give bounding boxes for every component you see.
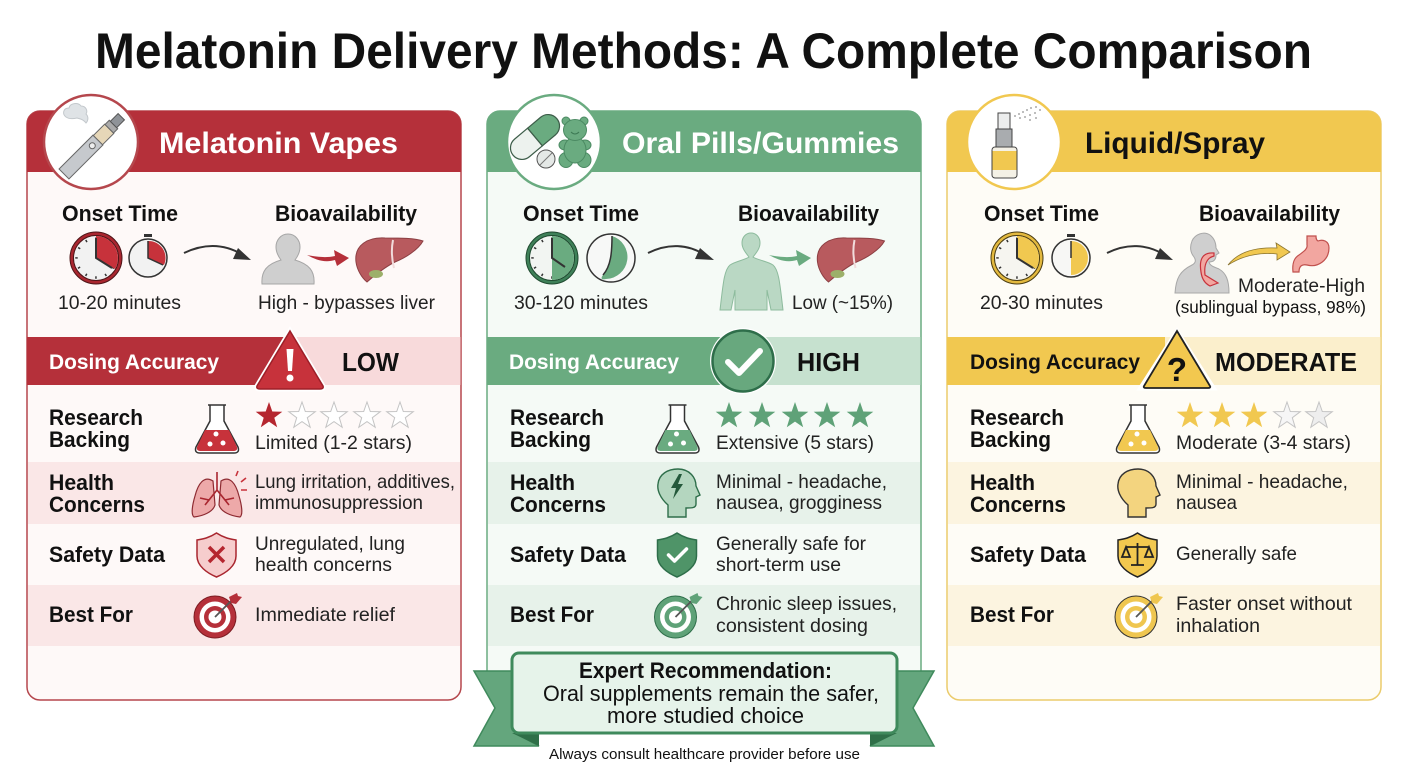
row: health concerns bbox=[510, 469, 887, 517]
row: research backing: Limited (1-2 stars) bbox=[255, 432, 412, 454]
icon: full body person bbox=[720, 233, 783, 310]
row: best for: Best For bbox=[970, 602, 1054, 627]
rating stars bbox=[716, 402, 873, 427]
header: melatonin vapes bbox=[27, 111, 461, 172]
row: best for bbox=[49, 593, 396, 638]
arrow: person to liver bbox=[307, 250, 349, 266]
row: safety data: Safety Data bbox=[49, 542, 166, 567]
icon: warning triangle bbox=[257, 331, 323, 389]
heading: bioavailability: Bioavailability bbox=[275, 201, 418, 226]
icon: target bbox=[654, 593, 702, 638]
icon: question triangle bbox=[1139, 330, 1215, 389]
icon: lungs bbox=[192, 471, 247, 517]
band: dosing accuracy: Dosing Accuracy bbox=[970, 351, 1140, 374]
callout: expert recommendation ribbon bbox=[474, 653, 934, 746]
panel: melatonin vapes bbox=[27, 95, 461, 700]
icon: clock bbox=[526, 232, 578, 284]
band: dosing accuracy bbox=[947, 337, 1380, 385]
row: research backing: Backing bbox=[510, 427, 591, 452]
icon: flask bbox=[196, 405, 238, 453]
row: health concerns: Minimal - headache, bbox=[716, 471, 887, 493]
band: dosing accuracy bbox=[27, 337, 460, 385]
icon: check badge bbox=[710, 328, 776, 394]
row: safety data: Unregulated, lung bbox=[255, 533, 405, 555]
icon: flask bbox=[1116, 405, 1160, 453]
value: onset: 20-30 minutes bbox=[980, 292, 1103, 314]
row: health concerns: Concerns bbox=[49, 492, 145, 517]
header: melatonin vapes: Melatonin Vapes bbox=[159, 127, 398, 160]
row: health concerns bbox=[970, 469, 1348, 517]
row: best for bbox=[510, 593, 897, 638]
row: safety data bbox=[510, 533, 866, 577]
panel: liquid and spray bbox=[947, 95, 1381, 700]
row: research backing: Research bbox=[510, 405, 604, 430]
icon: liver bbox=[356, 238, 423, 282]
header: oral pills and gummies bbox=[487, 111, 921, 172]
row: research backing: Backing bbox=[49, 427, 130, 452]
band: dosing accuracy: Dosing Accuracy bbox=[49, 351, 219, 374]
row tints bbox=[28, 462, 460, 646]
row: health concerns: Concerns bbox=[510, 492, 606, 517]
arrow: onset to bioavailability bbox=[648, 246, 714, 260]
row: best for: Best For bbox=[510, 602, 594, 627]
callout: expert recommendation ribbon: Expert Recommendation: bbox=[579, 658, 832, 683]
row: safety data: Safety Data bbox=[970, 542, 1087, 567]
row: research backing: Moderate (3-4 stars) bbox=[1176, 432, 1351, 454]
arrow: onset to bioavailability bbox=[1107, 246, 1173, 260]
row: health concerns: Lung irritation, additives, bbox=[255, 471, 455, 493]
value: bioavailability: Moderate-High bbox=[1238, 275, 1365, 297]
icon: stopwatch bbox=[129, 234, 167, 277]
row: best for: inhalation bbox=[1176, 615, 1260, 637]
row: research backing bbox=[49, 402, 413, 454]
icon: spray bottle bbox=[967, 95, 1061, 189]
value: bioavailability: High - bypasses liver bbox=[258, 292, 435, 314]
row tints bbox=[948, 462, 1380, 646]
row: research backing: Extensive (5 stars) bbox=[716, 432, 874, 454]
row: safety data bbox=[49, 533, 405, 577]
heading: onset time: Onset Time bbox=[984, 201, 1099, 226]
row: best for: Best For bbox=[49, 602, 133, 627]
icon: head bbox=[1118, 469, 1160, 517]
row: best for: Faster onset without bbox=[1176, 593, 1353, 615]
icon: flask bbox=[656, 405, 699, 453]
row: best for: Chronic sleep issues, bbox=[716, 593, 897, 615]
header: oral pills and gummies: Oral Pills/Gummies bbox=[622, 127, 899, 160]
row: health concerns: Health bbox=[510, 470, 575, 495]
icon: head with bolt bbox=[658, 469, 700, 517]
row: health concerns: Concerns bbox=[970, 492, 1066, 517]
icon: stopwatch bbox=[1052, 234, 1090, 277]
arrow: throat to stomach bbox=[1228, 243, 1290, 265]
row: health concerns bbox=[49, 470, 455, 517]
icon: question triangle: ? bbox=[1167, 351, 1187, 388]
value: onset: 30-120 minutes bbox=[514, 292, 648, 314]
row: research backing bbox=[970, 402, 1351, 454]
row: research backing: Research bbox=[970, 405, 1064, 430]
row: best for: consistent dosing bbox=[716, 615, 868, 637]
title: Melatonin Delivery Methods: A Complete Comparison bbox=[95, 23, 1312, 79]
heading: onset time: Onset Time bbox=[523, 201, 639, 226]
band: dosing accuracy bbox=[487, 337, 920, 385]
icon: clock bbox=[70, 232, 122, 284]
icon: person bbox=[262, 234, 314, 284]
icon: pills and gummy bear bbox=[506, 95, 601, 189]
icon: shield check bbox=[658, 533, 696, 577]
icon: target bbox=[194, 593, 242, 638]
band: dosing accuracy: LOW bbox=[342, 347, 399, 377]
row: health concerns: Health bbox=[49, 470, 114, 495]
band: dosing accuracy: MODERATE bbox=[1215, 347, 1357, 377]
icon: liver bbox=[817, 238, 884, 282]
arrow: person to liver bbox=[769, 250, 811, 266]
row: research backing: Research bbox=[49, 405, 143, 430]
heading: onset time: Onset Time bbox=[62, 201, 178, 226]
rating stars bbox=[256, 402, 413, 427]
icon: shield x bbox=[197, 533, 236, 577]
value: bioavailability: (sublingual bypass, 98%) bbox=[1175, 297, 1366, 317]
icon: half-hour timer bbox=[587, 234, 635, 282]
row: health concerns: Minimal - headache, bbox=[1176, 471, 1348, 493]
icon: throat profile bbox=[1175, 233, 1229, 293]
band: dosing accuracy: Dosing Accuracy bbox=[509, 351, 679, 374]
row: best for bbox=[970, 593, 1353, 638]
heading: bioavailability: Bioavailability bbox=[1199, 201, 1341, 226]
value: bioavailability: Low (~15%) bbox=[792, 292, 893, 314]
row: best for: Immediate relief bbox=[255, 604, 396, 626]
row tints bbox=[488, 462, 920, 646]
icon: target bbox=[1115, 593, 1163, 638]
header: liquid and spray bbox=[947, 111, 1381, 172]
callout: expert recommendation ribbon: more studied choice bbox=[607, 703, 804, 728]
row: safety data bbox=[970, 533, 1297, 577]
band: dosing accuracy: HIGH bbox=[797, 347, 860, 377]
row: safety data: Safety Data bbox=[510, 542, 627, 567]
callout: expert recommendation ribbon: Oral supplements remain the safer, bbox=[543, 681, 879, 706]
row: research backing bbox=[510, 402, 874, 454]
row: health concerns: Health bbox=[970, 470, 1035, 495]
icon: clock bbox=[991, 232, 1043, 284]
panel: oral pills and gummies bbox=[487, 95, 921, 700]
row: health concerns: immunosuppression bbox=[255, 492, 423, 514]
heading: bioavailability: Bioavailability bbox=[738, 201, 880, 226]
row: safety data: health concerns bbox=[255, 554, 392, 576]
icon: shield scales bbox=[1118, 533, 1157, 577]
row: safety data: short-term use bbox=[716, 554, 841, 576]
header: liquid and spray: Liquid/Spray bbox=[1085, 127, 1265, 160]
footnote: Always consult healthcare provider before use bbox=[549, 747, 860, 763]
row: safety data: Generally safe bbox=[1176, 543, 1297, 565]
row: research backing: Backing bbox=[970, 427, 1051, 452]
value: bioavailability bbox=[1175, 275, 1366, 317]
row: health concerns: nausea, grogginess bbox=[716, 492, 882, 514]
value: onset: 10-20 minutes bbox=[58, 292, 181, 314]
row: health concerns: nausea bbox=[1176, 492, 1237, 514]
rating stars bbox=[1177, 402, 1332, 427]
arrow: onset to bioavailability bbox=[184, 246, 251, 260]
row: safety data: Generally safe for bbox=[716, 533, 866, 555]
icon: vape pen bbox=[44, 95, 138, 189]
icon: stomach bbox=[1293, 236, 1329, 272]
